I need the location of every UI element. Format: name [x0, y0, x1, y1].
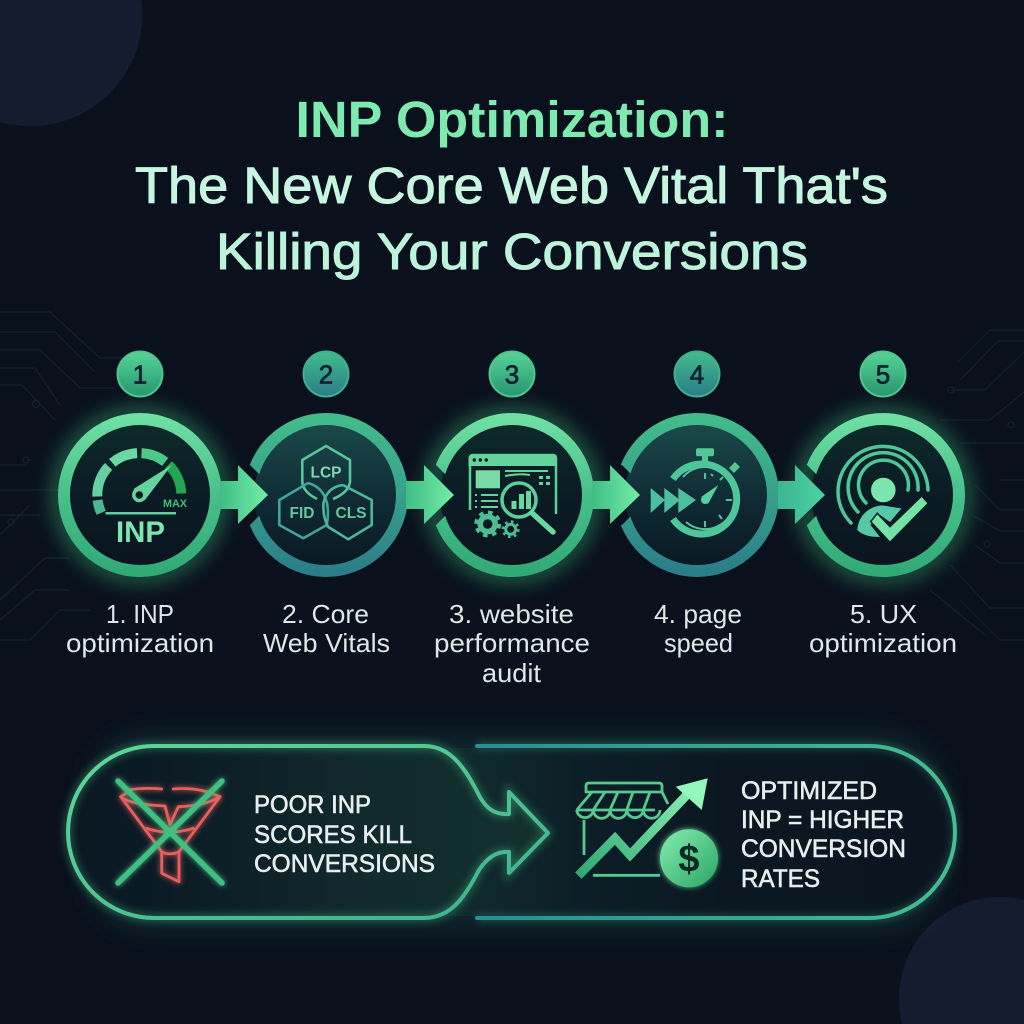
- icon: Core Web Vitals hexagons: [279, 446, 372, 539]
- bottom panel: left problem pill with arrow: [68, 746, 548, 918]
- step label 5: [809, 599, 957, 658]
- problem text: CONVERSIONS: [254, 850, 435, 878]
- number badge 2: [304, 352, 348, 396]
- arrow 3 to 4: [592, 465, 640, 524]
- solution text: INP = HIGHER: [741, 806, 904, 834]
- step 1 circle: [60, 415, 220, 575]
- solution text: CONVERSION: [741, 835, 906, 863]
- icon: stopwatch page speed: [651, 448, 740, 534]
- title line 3: Killing Your Conversions: [216, 223, 808, 280]
- problem text: [254, 791, 435, 878]
- pill haze glow: [90, 735, 940, 929]
- problem text: POOR INP: [254, 791, 371, 819]
- number badge 3: [490, 352, 534, 396]
- title line 1: INP Optimization:: [296, 91, 728, 148]
- decorative corner circle top left: [0, 0, 142, 126]
- step label 2: 2. Core: [282, 599, 369, 629]
- icon: INP gauge: MAX: [163, 498, 188, 510]
- problem text: SCORES KILL: [254, 821, 412, 849]
- step 3 circle: [432, 415, 592, 575]
- number badge 3: 3: [505, 360, 519, 390]
- step 5 circle: [803, 415, 963, 575]
- step label 2: Web Vitals: [263, 628, 390, 658]
- step label 3: 3. website: [449, 599, 574, 629]
- arrow 1 to 2: [220, 465, 268, 524]
- circuit pattern right: [930, 330, 1024, 640]
- icon: website audit: [468, 455, 556, 537]
- icon: Core Web Vitals hexagons: CLS: [336, 505, 366, 522]
- step 2 circle: [250, 419, 402, 571]
- step label 2: [263, 599, 390, 658]
- icon: storefront with growth arrow and dollar coin: $: [678, 838, 700, 880]
- circuit pattern left: [0, 312, 130, 640]
- solution text: [741, 777, 906, 893]
- icon: broken funnel crossed out: [118, 781, 222, 883]
- step 4 circle: [621, 419, 773, 571]
- step label 3: performance: [434, 628, 590, 658]
- step label 5: 5. UX: [850, 599, 917, 629]
- arrow 2 to 3: [406, 465, 454, 524]
- number badge 5: [860, 352, 906, 396]
- number badge 4: 4: [690, 360, 704, 390]
- arrow 4 to 5: [778, 465, 825, 524]
- icon: Core Web Vitals hexagons: LCP: [310, 464, 342, 482]
- icon: INP gauge: INP: [116, 516, 165, 549]
- number badge 1: [118, 352, 162, 396]
- icon: INP gauge: [97, 453, 188, 549]
- step label 1: [66, 599, 214, 658]
- step label 4: 4. page: [654, 599, 742, 629]
- decorative corner circle bottom right: [899, 897, 1024, 1024]
- step label 3: [434, 599, 590, 688]
- bottom panel: right solution pill: [424, 746, 955, 918]
- number badge 5: 5: [876, 360, 890, 390]
- number badge 2: 2: [319, 360, 333, 390]
- icon: storefront with growth arrow and dollar coin: [577, 778, 718, 887]
- step label 3: audit: [482, 658, 542, 688]
- step label 1: optimization: [66, 628, 214, 658]
- title: [135, 91, 888, 280]
- solution text: OPTIMIZED: [741, 777, 877, 805]
- step label 4: [654, 599, 742, 658]
- number badge 1: 1: [133, 360, 147, 390]
- icon: Core Web Vitals hexagons: FID: [290, 505, 314, 522]
- title line 2: The New Core Web Vital That's: [135, 157, 888, 214]
- step label 5: optimization: [809, 628, 957, 658]
- step label 4: speed: [664, 628, 733, 658]
- number badge 4: [674, 352, 720, 396]
- solution text: RATES: [741, 865, 820, 893]
- step label 1: 1. INP: [106, 599, 174, 629]
- icon: UX optimization person: [838, 446, 928, 542]
